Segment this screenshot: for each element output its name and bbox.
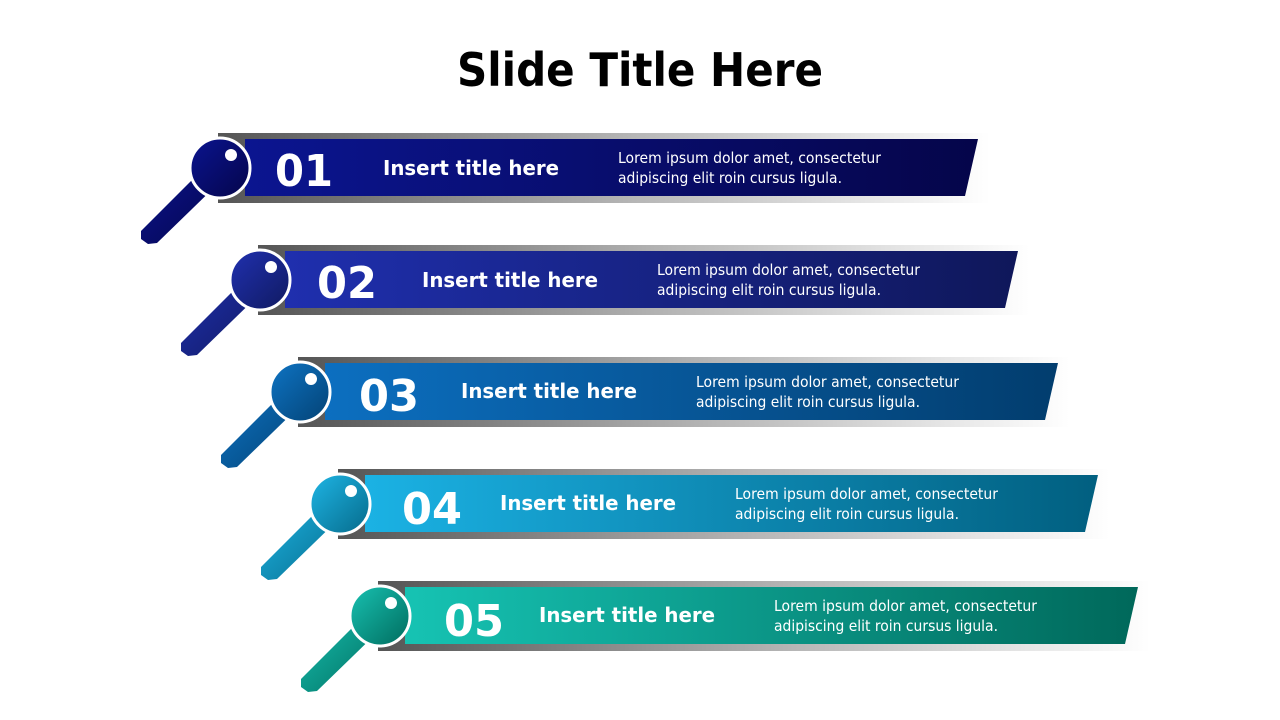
row 05 <box>301 581 1150 692</box>
text block: Lorem ipsum dolor amet, consectetur <box>696 373 960 391</box>
band <box>285 251 1018 308</box>
heading: Insert title here <box>383 156 559 180</box>
band <box>245 139 978 196</box>
icon: key <box>181 250 290 356</box>
icon: key <box>301 586 410 692</box>
number: 02 <box>317 258 377 309</box>
icon: key <box>261 474 370 580</box>
row 01 <box>141 133 990 244</box>
text block: Lorem ipsum dolor amet, consectetur <box>618 149 882 167</box>
icon: key <box>141 138 250 244</box>
row 03 <box>221 357 1070 468</box>
icon: key <box>221 362 330 468</box>
row 04 <box>261 469 1110 580</box>
heading: Insert title here <box>461 379 637 403</box>
text block: adipiscing elit roin cursus ligula. <box>696 393 920 411</box>
heading: Insert title here <box>422 268 598 292</box>
number: 05 <box>444 596 504 647</box>
heading: Insert title here <box>539 603 715 627</box>
text block: Lorem ipsum dolor amet, consectetur <box>657 261 921 279</box>
band <box>405 587 1138 644</box>
number: 01 <box>275 146 333 197</box>
row 02 <box>181 245 1030 356</box>
band <box>325 363 1058 420</box>
heading: Insert title here <box>500 491 676 515</box>
band <box>365 475 1098 532</box>
text block: adipiscing elit roin cursus ligula. <box>774 617 998 635</box>
text block: Lorem ipsum dolor amet, consectetur <box>774 597 1038 615</box>
title: Slide Title Here <box>457 43 823 97</box>
text block: adipiscing elit roin cursus ligula. <box>618 169 842 187</box>
number: 04 <box>402 484 462 535</box>
text block: Lorem ipsum dolor amet, consectetur <box>735 485 999 503</box>
text block: adipiscing elit roin cursus ligula. <box>657 281 881 299</box>
number: 03 <box>359 371 419 422</box>
text block: adipiscing elit roin cursus ligula. <box>735 505 959 523</box>
